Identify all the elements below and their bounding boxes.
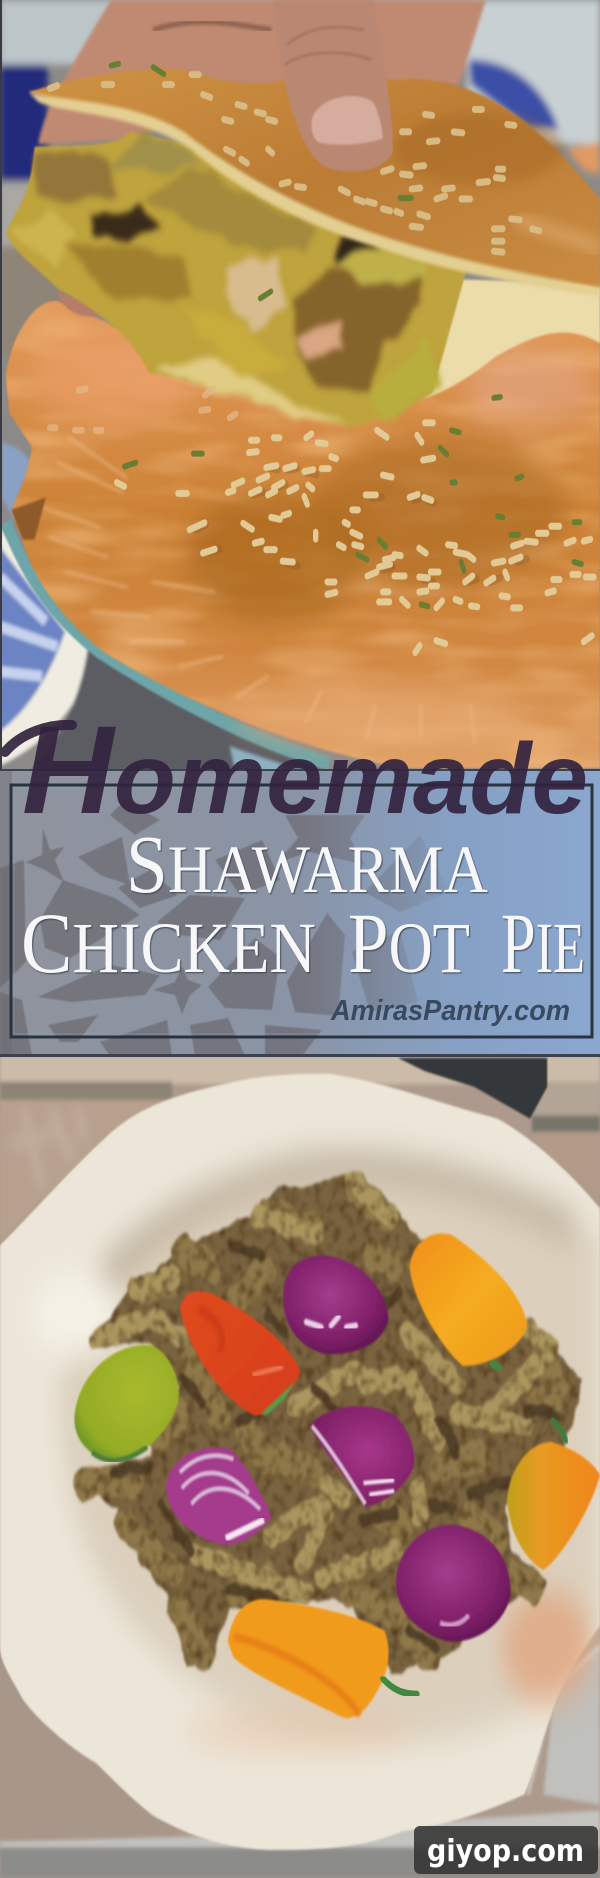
cut red onion — [310, 1406, 414, 1507]
whole red onion — [396, 1525, 511, 1642]
heading: Chicken Pot Pie — [21, 895, 585, 991]
red onion — [283, 1256, 388, 1354]
banner: blue title panel with lattice pattern — [0, 701, 600, 1057]
heading: Chicken Pot Pie: CHICKEN — [21, 895, 316, 991]
orange pepper right — [507, 1420, 600, 1570]
red pepper — [180, 1291, 300, 1415]
heading: Shawarma: SHAWARMA — [126, 818, 488, 910]
rolling pin handle — [398, 1058, 547, 1119]
photo: dough-lined dish with chicken, peppers and onions — [0, 1050, 600, 1878]
band edges — [0, 769, 600, 771]
shredded chicken — [78, 1174, 582, 1673]
lower pie crust — [6, 301, 600, 768]
sesame seeds — [50, 75, 594, 653]
left edge line — [0, 0, 2, 770]
finger — [274, 0, 393, 171]
crust fork marks — [42, 438, 474, 741]
green pepper — [74, 1345, 179, 1460]
dough crust — [0, 1074, 600, 1850]
watermark: giyop.com — [414, 1826, 598, 1874]
heading: Homemade: Homemade — [22, 701, 588, 840]
yellow pepper — [409, 1233, 527, 1369]
layered onion wedge — [166, 1447, 272, 1545]
pale bread underside — [421, 279, 600, 398]
lattice pattern — [0, 800, 450, 1056]
filling — [6, 132, 467, 428]
top crust — [29, 69, 600, 288]
website credit: AmirasPantry.com — [330, 995, 570, 1027]
hand — [38, 0, 486, 144]
countertop tiles — [0, 1055, 600, 1878]
glass pie dish rim — [6, 522, 329, 764]
plate: blue and white dish — [0, 443, 344, 780]
inner frame — [11, 785, 592, 1037]
heading: Chicken Pot Pie: POT — [348, 895, 470, 991]
parsley flakes — [111, 64, 582, 606]
photo: baked pie with hand lifting a slice — [0, 0, 600, 780]
watermark: giyop.com: giyop.com — [427, 1834, 584, 1869]
orange pepper bottom — [228, 1599, 417, 1718]
